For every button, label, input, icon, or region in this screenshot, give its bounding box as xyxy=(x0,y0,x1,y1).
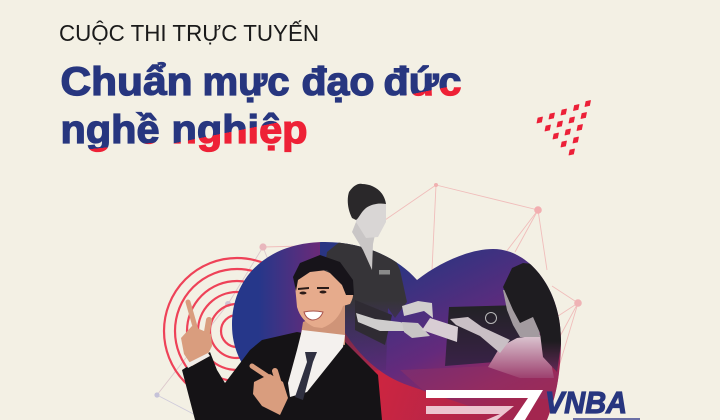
name badge xyxy=(379,270,390,274)
logo wordmark: VNBA xyxy=(545,385,627,420)
title: mực xyxy=(202,60,290,104)
heart shape backdrop xyxy=(225,232,570,420)
network lines and nodes xyxy=(154,183,582,420)
man in suit xyxy=(181,255,382,420)
shirt xyxy=(488,335,554,378)
lower hand xyxy=(402,322,430,338)
VNBA logo xyxy=(426,385,640,420)
hair bun xyxy=(348,184,386,220)
title: đạo xyxy=(302,60,374,104)
eyes and brows xyxy=(298,287,329,294)
hair xyxy=(293,255,354,295)
cuff xyxy=(186,353,210,368)
hair xyxy=(503,263,562,372)
forearm xyxy=(356,313,412,331)
tie xyxy=(295,352,317,400)
card xyxy=(422,318,458,342)
desk fade xyxy=(400,366,560,400)
title: nghề xyxy=(60,108,160,152)
subtitle: CUỘC THI TRỰC TUYẾN xyxy=(59,19,319,46)
seated woman at desk xyxy=(400,263,562,400)
logo mark xyxy=(426,390,543,420)
upper hand xyxy=(402,301,433,318)
smile xyxy=(304,311,323,320)
jacket xyxy=(182,332,382,420)
logo bottom bar xyxy=(573,418,640,420)
face xyxy=(356,204,386,238)
title: đức xyxy=(384,60,462,104)
decorative red dot triangle xyxy=(537,100,590,155)
title: Chuẩn xyxy=(60,60,192,104)
arm xyxy=(450,317,510,353)
concentric red rings xyxy=(164,258,310,404)
neck xyxy=(352,222,376,270)
neck xyxy=(300,305,345,345)
neck and face xyxy=(503,290,540,337)
pointing hand lower xyxy=(252,366,288,415)
face xyxy=(295,268,353,328)
pointing hand raised xyxy=(181,302,212,366)
title xyxy=(60,60,462,152)
monitor xyxy=(445,305,525,366)
infographic canvas xyxy=(60,20,640,420)
standing woman jacket xyxy=(324,242,407,370)
standing woman lower sleeve shadow xyxy=(355,300,392,345)
standing woman head and arms xyxy=(348,184,458,342)
shirt xyxy=(288,330,345,397)
title: nghiệp xyxy=(172,108,308,152)
